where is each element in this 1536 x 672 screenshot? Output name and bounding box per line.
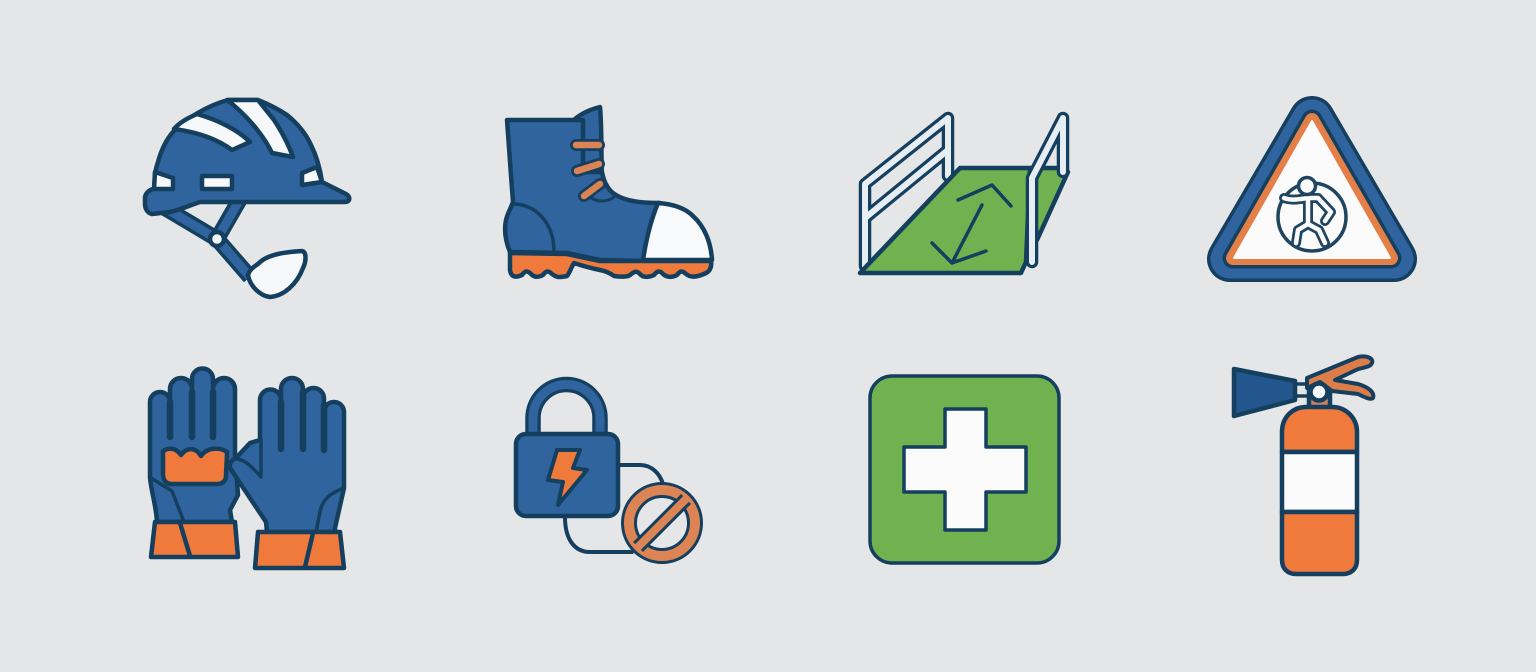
nozzle <box>1234 369 1295 416</box>
connecting cable <box>565 465 663 552</box>
lightning bolt <box>548 450 587 505</box>
right glove thumb seam <box>235 440 261 477</box>
icon: fire extinguisher <box>1234 356 1373 574</box>
boot tongue <box>575 107 602 192</box>
cylinder <box>1282 407 1357 574</box>
ramp surface <box>860 168 1030 273</box>
shackle <box>533 384 600 434</box>
boot upper <box>505 120 700 261</box>
right glove finger lines <box>281 392 324 450</box>
triangle layers <box>1230 119 1394 259</box>
icon: ramp with guard rails <box>860 118 1068 273</box>
icon: warning triangle <box>1230 119 1394 259</box>
icon: lockout padlock <box>516 384 695 556</box>
handle <box>1307 356 1373 399</box>
white cross <box>904 409 1026 530</box>
boot toe cap <box>643 203 712 260</box>
right side panel <box>1030 168 1068 240</box>
hose connectors <box>1295 384 1310 396</box>
prohibition sign <box>629 490 695 556</box>
icon: hard hat <box>145 100 349 297</box>
chin cup <box>248 251 306 297</box>
palm patch <box>163 449 227 484</box>
lock body <box>516 434 618 516</box>
valve <box>1310 384 1328 400</box>
left glove wrist seam <box>151 478 184 522</box>
left rail <box>865 118 948 266</box>
icon: first aid cross <box>870 376 1059 563</box>
chin strap <box>160 192 250 277</box>
helmet shell <box>145 100 349 214</box>
green panel <box>870 376 1059 563</box>
helmet white stripes <box>174 100 293 157</box>
boot laces <box>576 145 600 196</box>
boot heel seam <box>513 204 554 252</box>
boot tongue fold <box>590 196 615 201</box>
left glove cuff <box>151 522 238 557</box>
left glove finger lines <box>170 392 213 437</box>
person in circle <box>1278 178 1346 251</box>
left glove <box>150 368 238 522</box>
right glove cuff <box>255 532 344 568</box>
right rail <box>1032 118 1063 262</box>
helmet vents <box>154 167 322 189</box>
right cuff seam <box>305 533 313 567</box>
ramp arrows <box>932 185 1011 263</box>
icon: safety boot <box>505 107 712 277</box>
boot sole <box>510 253 711 277</box>
icon: gloves <box>150 368 344 568</box>
left cuff seam <box>180 523 190 556</box>
right glove <box>230 378 344 532</box>
neck <box>1309 390 1330 408</box>
right glove wrist seam <box>316 488 344 532</box>
